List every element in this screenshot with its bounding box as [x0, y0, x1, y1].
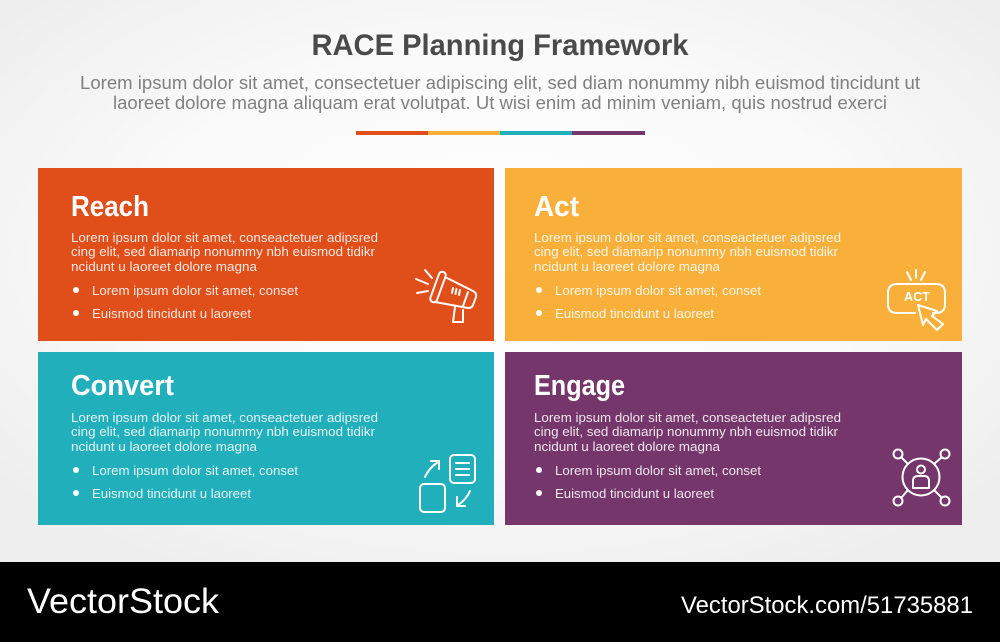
icon: engaged user network [894, 450, 950, 506]
subtitle text [80, 72, 920, 113]
footer logo: VectorStock [27, 582, 220, 621]
icon: act button with cursor: ACT [904, 289, 930, 304]
bullet list: Reach: Euismod tincidunt u laoreet [92, 306, 251, 321]
text block: Act description: cing elit, sed diamarip nonummy nbh euismod tidikr [534, 244, 839, 259]
panel: Convert [38, 352, 494, 525]
bullet list: Convert [73, 463, 298, 501]
text block: Engage description [534, 410, 841, 454]
heading: Engage: Engage [534, 370, 625, 402]
bullet list: Reach [73, 283, 298, 321]
text block: Engage description: ncidunt u laoreet dolore magna [534, 439, 721, 454]
bullet list: Act: Euismod tincidunt u laoreet [555, 306, 714, 321]
bullet list: Convert: Euismod tincidunt u laoreet [92, 486, 251, 501]
heading: Reach: Reach [71, 191, 149, 223]
icon: convert document and arrows [420, 455, 475, 512]
text block: Convert description: Lorem ipsum dolor sit amet, conseactetuer adipsred [71, 410, 378, 425]
text block: Engage description: cing elit, sed diamarip nonummy nbh euismod tidikr [534, 424, 839, 439]
text block: Act description: Lorem ipsum dolor sit amet, conseactetuer adipsred [534, 230, 841, 245]
bullet list: Reach: Lorem ipsum dolor sit amet, conset [92, 283, 298, 298]
text block: Reach description: ncidunt u laoreet dolore magna [71, 259, 258, 274]
panel: Act [505, 168, 962, 341]
text block: Reach description: Lorem ipsum dolor sit amet, conseactetuer adipsred [71, 230, 378, 245]
text block: Convert description [71, 410, 378, 454]
title: RACE Planning Framework [312, 29, 689, 62]
panel: Engage [505, 352, 962, 525]
text block: Convert description: ncidunt u laoreet dolore magna [71, 439, 258, 454]
bullet list: Engage: Euismod tincidunt u laoreet [555, 486, 714, 501]
footer image id: VectorStock.com/51735881 [681, 592, 973, 619]
heading: Convert: Convert [71, 370, 174, 402]
bullet list: Convert: Lorem ipsum dolor sit amet, conset [92, 463, 298, 478]
text block: Act description: ncidunt u laoreet dolore magna [534, 259, 721, 274]
bullet list: Engage: Lorem ipsum dolor sit amet, conset [555, 463, 761, 478]
subtitle text: laoreet dolore magna aliquam erat volutpat. Ut wisi enim ad minim veniam, quis nostrud exerci [113, 92, 887, 113]
subtitle text: Lorem ipsum dolor sit amet, consectetuer adipiscing elit, sed diam nonummy nibh euismod tincidunt ut [80, 72, 920, 93]
text block: Reach description [71, 230, 378, 274]
footer bar [0, 562, 1000, 642]
bullet list: Act: Lorem ipsum dolor sit amet, conset [555, 283, 761, 298]
icon: act button with cursor [888, 270, 945, 330]
text block: Reach description: cing elit, sed diamarip nonummy nbh euismod tidikr [71, 244, 376, 259]
colour divider [356, 131, 645, 135]
bullet list: Act [536, 283, 761, 321]
heading: Act: Act [534, 191, 579, 223]
icon: megaphone [416, 270, 476, 322]
text block: Convert description: cing elit, sed diamarip nonummy nbh euismod tidikr [71, 424, 376, 439]
text block: Act description [534, 230, 841, 274]
text block: Engage description: Lorem ipsum dolor sit amet, conseactetuer adipsred [534, 410, 841, 425]
bullet list: Engage [536, 463, 761, 501]
panel: Reach [38, 168, 494, 341]
